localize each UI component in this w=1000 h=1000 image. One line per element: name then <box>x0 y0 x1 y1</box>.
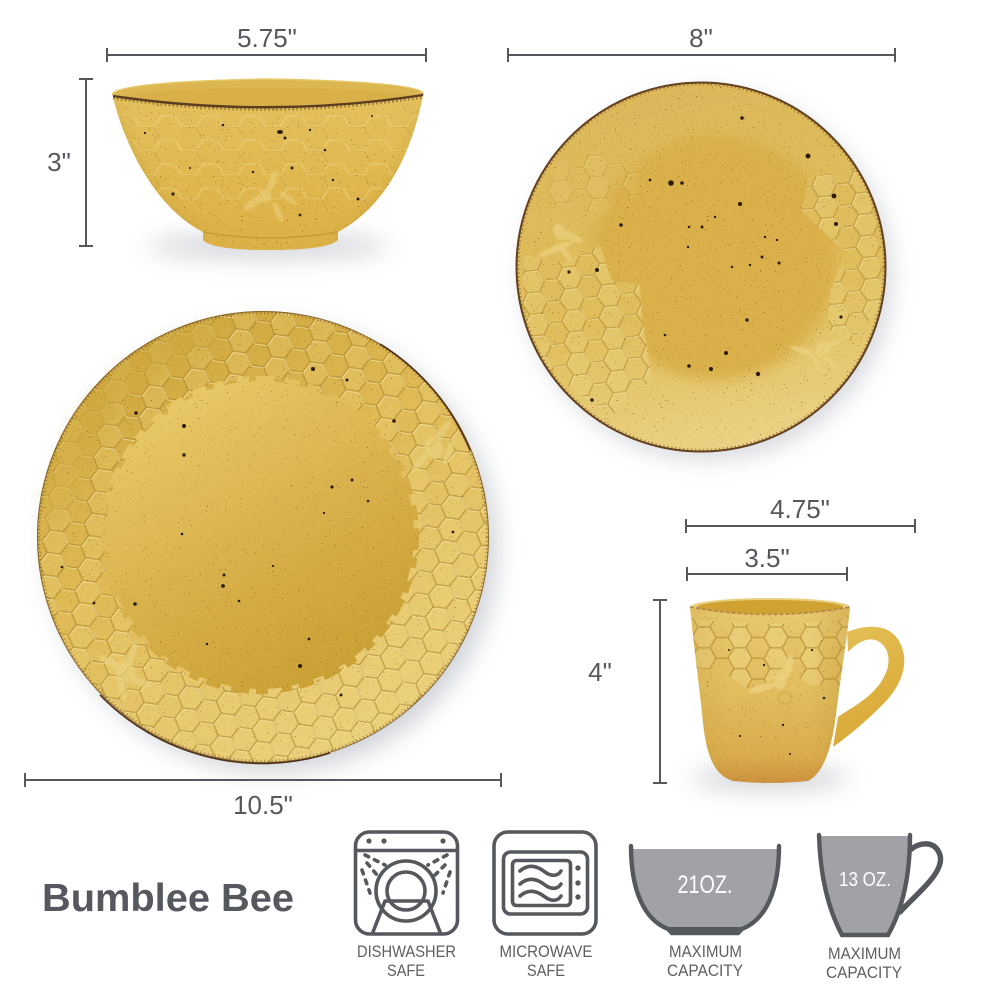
icon: embossed bee on bowl <box>241 170 299 223</box>
dimension: mug height 4 in: 4" <box>588 657 612 687</box>
dimension: mug width with handle 4.75 in: 4.75" <box>770 494 830 524</box>
icon: microwave safe <box>494 832 596 934</box>
dimension: salad plate width 8 in: 8" <box>689 23 713 53</box>
dinner plate photo <box>30 300 500 772</box>
dimension: mug diameter 3.5 in: 3.5" <box>744 543 790 573</box>
icon: embossed bee on mug <box>748 654 796 704</box>
label: dishwasher safe: SAFE <box>387 961 425 980</box>
dimension: dinner plate width 10.5 in <box>25 773 501 820</box>
icon: mug capacity 13 oz: 13 OZ. <box>839 869 891 891</box>
icon: bowl capacity 21 oz <box>631 846 779 934</box>
label: microwave safe: MICROWAVE <box>500 942 592 961</box>
dimension: bowl height 3 in <box>47 79 93 246</box>
dimension: bowl height 3 in: 3" <box>47 147 71 177</box>
icon: embossed bee right <box>789 337 844 376</box>
label: dishwasher safe: DISHWASHER <box>357 942 456 961</box>
speckles on bowl <box>144 115 373 216</box>
label: bowl maximum capacity: MAXIMUM <box>669 942 742 961</box>
bowl photo <box>100 79 436 258</box>
icon: mug capacity 13 oz <box>819 835 941 935</box>
salad plate photo <box>510 75 895 460</box>
dimension: bowl width 5.75 in <box>107 23 426 62</box>
brand title: Bumblee Bee <box>42 877 294 920</box>
icon: embossed bee left <box>538 221 583 263</box>
label: mug maximum capacity: MAXIMUM <box>828 944 901 963</box>
label: mug maximum capacity: CAPACITY <box>826 963 902 982</box>
icon: bowl capacity 21 oz: 21OZ. <box>678 871 732 899</box>
icon: dishwasher safe <box>356 832 458 934</box>
speckles on dinner plate <box>61 367 454 696</box>
honeycomb: upper-left patch <box>545 150 638 215</box>
speckles on mug <box>728 649 825 755</box>
dimension: bowl width 5.75 in: 5.75" <box>237 23 297 53</box>
speckles on salad plate <box>567 116 843 402</box>
label: microwave safe: SAFE <box>527 961 565 980</box>
dinner plate well <box>104 379 416 691</box>
label: bowl maximum capacity: CAPACITY <box>667 961 743 980</box>
mug handle <box>833 627 904 747</box>
mug photo <box>688 598 904 789</box>
dimension: mug diameter 3.5 in <box>687 543 847 581</box>
dimension: dinner plate width 10.5 in: 10.5" <box>233 790 293 820</box>
icon: embossed bee upper right <box>410 419 457 473</box>
honeycomb band <box>30 300 500 770</box>
dimension: mug height 4 in <box>588 600 667 783</box>
honeycomb: right patch <box>802 166 886 342</box>
dimension: mug width with handle 4.75 in <box>686 494 915 533</box>
dimension: salad plate width 8 in <box>508 23 895 62</box>
icon: embossed bee lower left <box>97 641 153 702</box>
honeycomb: lower-left patch <box>522 246 652 418</box>
